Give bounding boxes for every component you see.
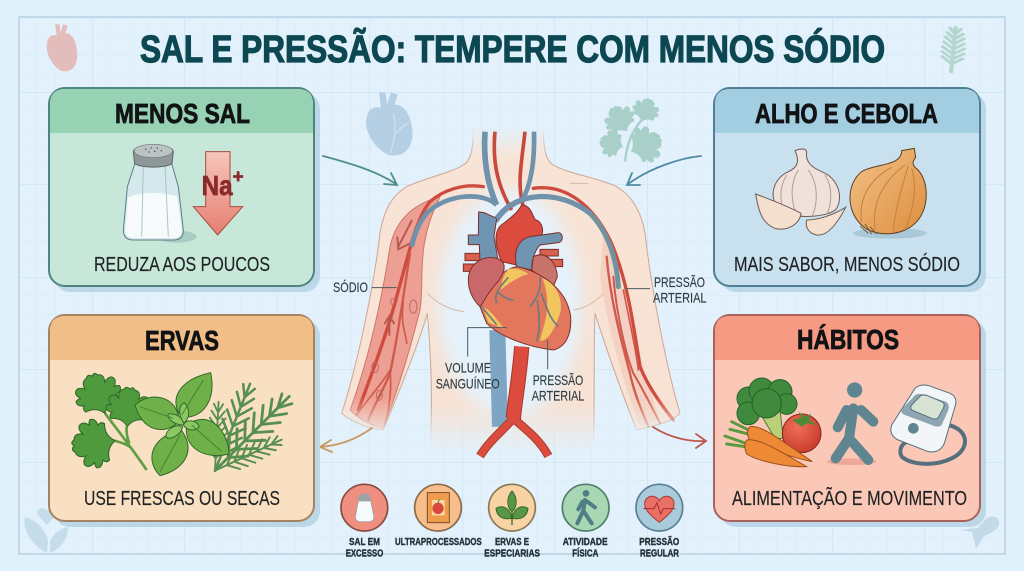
heading: ALHO E CEBOLA bbox=[755, 98, 938, 129]
label: sal em excesso: EXCESSO bbox=[346, 548, 383, 560]
icon: ervas e especiarias bbox=[489, 484, 535, 531]
arrow: menos sal to body bbox=[323, 156, 397, 185]
label: pressao arterial center: ARTERIAL bbox=[532, 388, 584, 404]
lower vena cava bbox=[497, 330, 500, 427]
label: pressao arterial right: PRESSÃO bbox=[654, 274, 705, 290]
icon: pale parsley bbox=[596, 94, 669, 169]
icon: herbs bbox=[69, 367, 299, 481]
arrow: body to habitos bbox=[653, 427, 706, 448]
icon row bbox=[341, 484, 683, 560]
parsley bbox=[69, 367, 152, 471]
icon: salt shaker and sodium arrow: Na bbox=[202, 170, 233, 201]
label: ultraprocessados: ULTRAPROCESSADOS bbox=[395, 536, 482, 548]
icon: corner rosemary bbox=[940, 26, 966, 73]
label: pressao regular: PRESSÃO bbox=[639, 535, 679, 548]
icon: corner hands and heart bbox=[24, 508, 68, 553]
neck vessels bbox=[412, 132, 534, 247]
blood pressure monitor bbox=[900, 425, 965, 464]
chest bbox=[438, 190, 582, 417]
coronary vessels bbox=[482, 277, 558, 342]
label: atividade fisica: FÍSICA bbox=[572, 547, 599, 560]
basil bbox=[135, 373, 229, 476]
icon: vegetables, walking figure, blood pressure monitor bbox=[725, 378, 965, 467]
label: atividade fisica: ATIVIDADE bbox=[563, 536, 608, 548]
label: pressao arterial right: ARTERIAL bbox=[653, 290, 707, 306]
label: sodio: SÓDIO bbox=[333, 279, 368, 295]
caption: USE FRESCAS OU SECAS bbox=[84, 488, 280, 510]
rosemary bbox=[203, 379, 299, 481]
label: ervas e especiarias: ESPECIARIAS bbox=[484, 548, 540, 560]
heart bbox=[463, 196, 590, 350]
torso and arms bbox=[342, 127, 680, 457]
label: volume sanguineo: VOLUME bbox=[445, 360, 491, 376]
walking figure bbox=[827, 458, 877, 465]
label: pressao arterial center bbox=[532, 372, 584, 404]
label: sal em excesso bbox=[346, 536, 383, 560]
label: pressao regular: REGULAR bbox=[640, 548, 679, 560]
heading: MENOS SAL bbox=[115, 98, 250, 129]
label: volume sanguineo bbox=[436, 360, 500, 391]
icon: atividade fisica bbox=[562, 484, 609, 531]
title: SAL E PRESSÃO: TEMPERE COM MENOS SÓDIO bbox=[140, 27, 885, 71]
label: ervas e especiarias: ERVAS E bbox=[495, 536, 529, 548]
central circulatory illustration bbox=[342, 93, 680, 457]
panel: alho e cebola bbox=[714, 88, 986, 292]
icon: pressao regular bbox=[636, 484, 683, 531]
caption: REDUZA AOS POUCOS bbox=[94, 254, 270, 276]
label: volume sanguineo: SANGUÍNEO bbox=[436, 375, 500, 391]
arrow: alho e cebola to body bbox=[627, 156, 701, 185]
icon: sal em excesso bbox=[341, 484, 388, 531]
fat patches bbox=[483, 269, 561, 341]
leader lines bbox=[372, 288, 650, 369]
icon: ultraprocessados bbox=[415, 484, 461, 531]
panel: ervas bbox=[49, 315, 320, 527]
caption: ALIMENTAÇÃO E MOVIMENTO bbox=[732, 486, 967, 510]
caption: MAIS SABOR, MENOS SÓDIO bbox=[734, 253, 960, 276]
icon: pale heart bbox=[366, 93, 412, 155]
label: atividade fisica bbox=[563, 536, 608, 560]
panel: menos sal bbox=[49, 88, 320, 292]
label: pressao regular bbox=[639, 535, 679, 560]
heading: HÁBITOS bbox=[797, 324, 899, 355]
left arm vessels bbox=[350, 186, 483, 428]
label: ervas e especiarias bbox=[484, 536, 540, 560]
icon: corner heart bbox=[47, 24, 77, 71]
icon: garlic and onion bbox=[756, 148, 927, 239]
label: sal em excesso: SAL EM bbox=[349, 536, 380, 548]
panel: habitos bbox=[714, 315, 986, 527]
icon: salt shaker and sodium arrow bbox=[123, 144, 244, 243]
label: pressao arterial center: PRESSÃO bbox=[533, 372, 583, 388]
icon: salt shaker and sodium arrow: + bbox=[233, 166, 244, 187]
pectoral lines bbox=[427, 183, 603, 312]
label: pressao arterial right bbox=[653, 274, 707, 306]
heading: ERVAS bbox=[145, 325, 219, 356]
vegetables bbox=[760, 410, 783, 438]
right arm vessels bbox=[497, 188, 673, 427]
icon: corner heart with pulse bbox=[960, 517, 999, 549]
arrow: body to ervas bbox=[320, 428, 372, 452]
aorta descending bbox=[480, 347, 548, 456]
